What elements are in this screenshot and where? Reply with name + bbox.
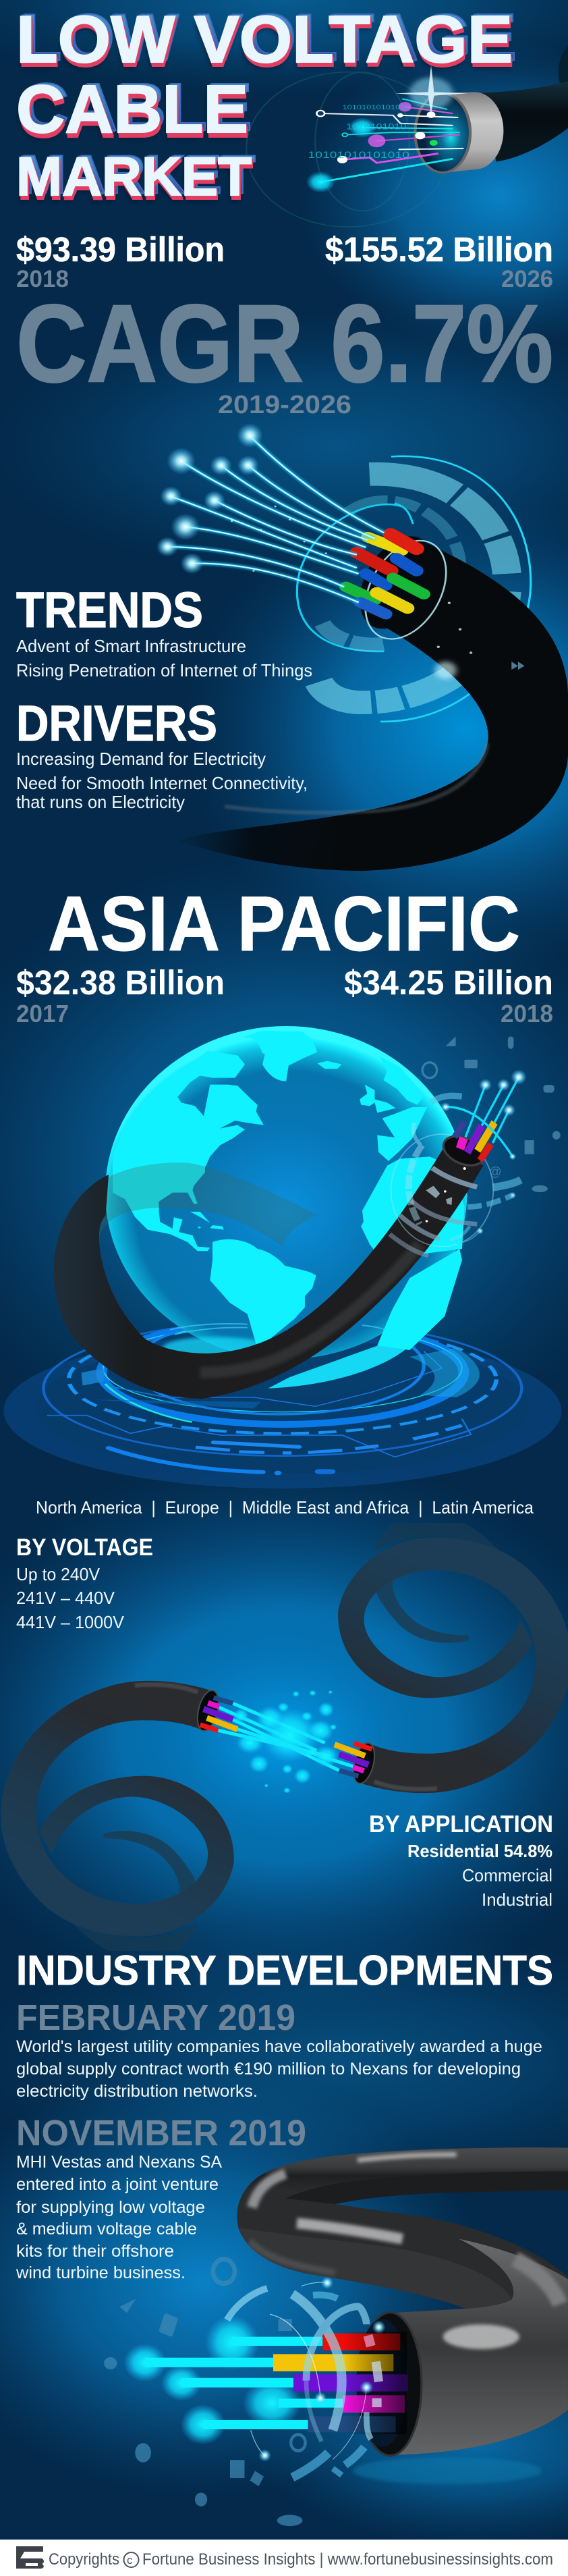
panel: by application: BY APPLICATION	[369, 1811, 553, 1837]
faint icons	[422, 1036, 561, 1192]
faint icons around the lower cable	[104, 2259, 306, 2526]
panel: by application: Industrial	[482, 1889, 552, 1910]
cable illustration: hero fibre cable with metal ferrule: 10101010101010	[308, 149, 409, 160]
asia pacific value 2017: $32.38 Billion	[16, 963, 225, 1002]
hud arcs over cable	[391, 1123, 493, 1247]
trends list: Rising Penetration of Internet of Things	[16, 660, 312, 680]
development: february 2019: global supply contract worth €190 million to Nexans for developing	[16, 2060, 521, 2078]
asia pacific value 2017	[16, 963, 225, 1027]
light beams	[123, 2315, 302, 2445]
development: november 2019: entered into a joint venture	[16, 2175, 219, 2194]
cable illustration: hero fibre cable with metal ferrule: 1010101010	[346, 122, 406, 131]
panel: by application: Residential 54.8%	[407, 1841, 552, 1861]
lower arm shading	[238, 2228, 511, 2309]
drivers list	[16, 749, 308, 812]
illustration: joined cables with sparks	[1, 1523, 568, 1951]
panel: by application: Commercial	[462, 1865, 552, 1885]
faint icons: @	[489, 1164, 501, 1179]
coloured strands	[322, 2334, 400, 2351]
title: MARKET	[16, 146, 252, 207]
drivers list: Need for Smooth Internet Connectivity,	[16, 773, 308, 793]
illustration: fibre optic cable with HUD rings	[157, 423, 568, 871]
panel: by voltage: Up to 240V	[16, 1564, 101, 1584]
title: CABLE	[16, 72, 248, 147]
development: february 2019: FEBRUARY 2019	[16, 1997, 295, 2038]
cable mouth	[359, 2313, 422, 2456]
title: LOW VOLTAGE	[16, 2, 513, 76]
development: november 2019: NOVEMBER 2019	[16, 2113, 306, 2153]
globe	[105, 1026, 467, 1359]
illustration: cable with coloured strands and light beams	[123, 2147, 568, 2484]
development: november 2019: wind turbine business.	[16, 2263, 186, 2282]
asia pacific value 2018: 2018	[501, 1000, 553, 1027]
continents	[113, 1031, 465, 1350]
cable head shell	[387, 2239, 568, 2455]
market size 2018: $93.39 Billion	[16, 230, 225, 269]
asia pacific value 2018	[344, 963, 553, 1027]
heading: trends: TRENDS	[16, 582, 203, 638]
development: november 2019: MHI Vestas and Nexans SA	[16, 2153, 222, 2172]
fibre tips	[446, 1077, 519, 1156]
asia pacific value 2017: 2017	[16, 1000, 69, 1027]
drivers list: Increasing Demand for Electricity	[16, 749, 266, 769]
drivers list: that runs on Electricity	[16, 792, 185, 812]
copyright text: Copyrights	[49, 2550, 119, 2569]
panel: trends	[16, 582, 312, 680]
translucent cable behind globe	[99, 1162, 317, 1247]
illustration: globe wrapped by cable	[54, 1026, 493, 1399]
copyright text: c	[127, 2554, 133, 2567]
panel: by voltage: 241V – 440V	[16, 1588, 115, 1608]
black cable	[54, 1142, 483, 1399]
trends list: Advent of Smart Infrastructure	[16, 636, 246, 656]
cable head with coloured strands	[422, 1036, 561, 1243]
bottom sheen	[170, 1324, 390, 1335]
heading: asia pacific: ASIA PACIFIC	[48, 881, 520, 967]
development: november 2019	[16, 2113, 306, 2282]
cable illustration: hero fibre cable with metal ferrule	[246, 45, 568, 227]
hud arcs around the cable head	[431, 1096, 521, 1243]
panel: by voltage	[16, 1534, 153, 1632]
development: february 2019	[16, 1997, 542, 2101]
development: november 2019: for supplying low voltage	[16, 2198, 205, 2217]
market size 2026	[325, 230, 553, 292]
footer	[0, 2540, 568, 2576]
market size 2026: $155.52 Billion	[325, 230, 553, 269]
holographic disk	[3, 1318, 561, 1488]
upper band shading	[248, 2147, 568, 2199]
market size 2018	[16, 230, 225, 292]
heading: drivers: DRIVERS	[16, 695, 217, 751]
panel: by voltage: 441V – 1000V	[16, 1612, 125, 1632]
development: february 2019: electricity distribution networks.	[16, 2082, 258, 2101]
asia pacific value 2018: $34.25 Billion	[344, 963, 553, 1002]
trends list	[16, 636, 312, 680]
title	[16, 0, 517, 214]
regions list: North America | Europe | Middle East and Africa | Latin America	[36, 1497, 534, 1518]
panel: by application	[369, 1811, 553, 1910]
market size 2018: 2018	[16, 266, 69, 292]
CAGR: 2019-2026	[218, 391, 351, 419]
development: february 2019: World's largest utility companies have collaboratively awarded a huge	[16, 2037, 542, 2056]
development: november 2019: kits for their offshore	[16, 2242, 174, 2261]
panel: drivers	[16, 695, 308, 812]
market size 2026: 2026	[501, 266, 553, 292]
cable illustration: hero fibre cable with metal ferrule: 10101010101010	[342, 105, 410, 111]
icon: logo	[16, 2546, 44, 2569]
development: november 2019: & medium voltage cable	[16, 2220, 197, 2238]
panel: by voltage: BY VOLTAGE	[16, 1534, 153, 1561]
hud arcs	[227, 2282, 371, 2477]
cable body	[237, 2147, 568, 2455]
